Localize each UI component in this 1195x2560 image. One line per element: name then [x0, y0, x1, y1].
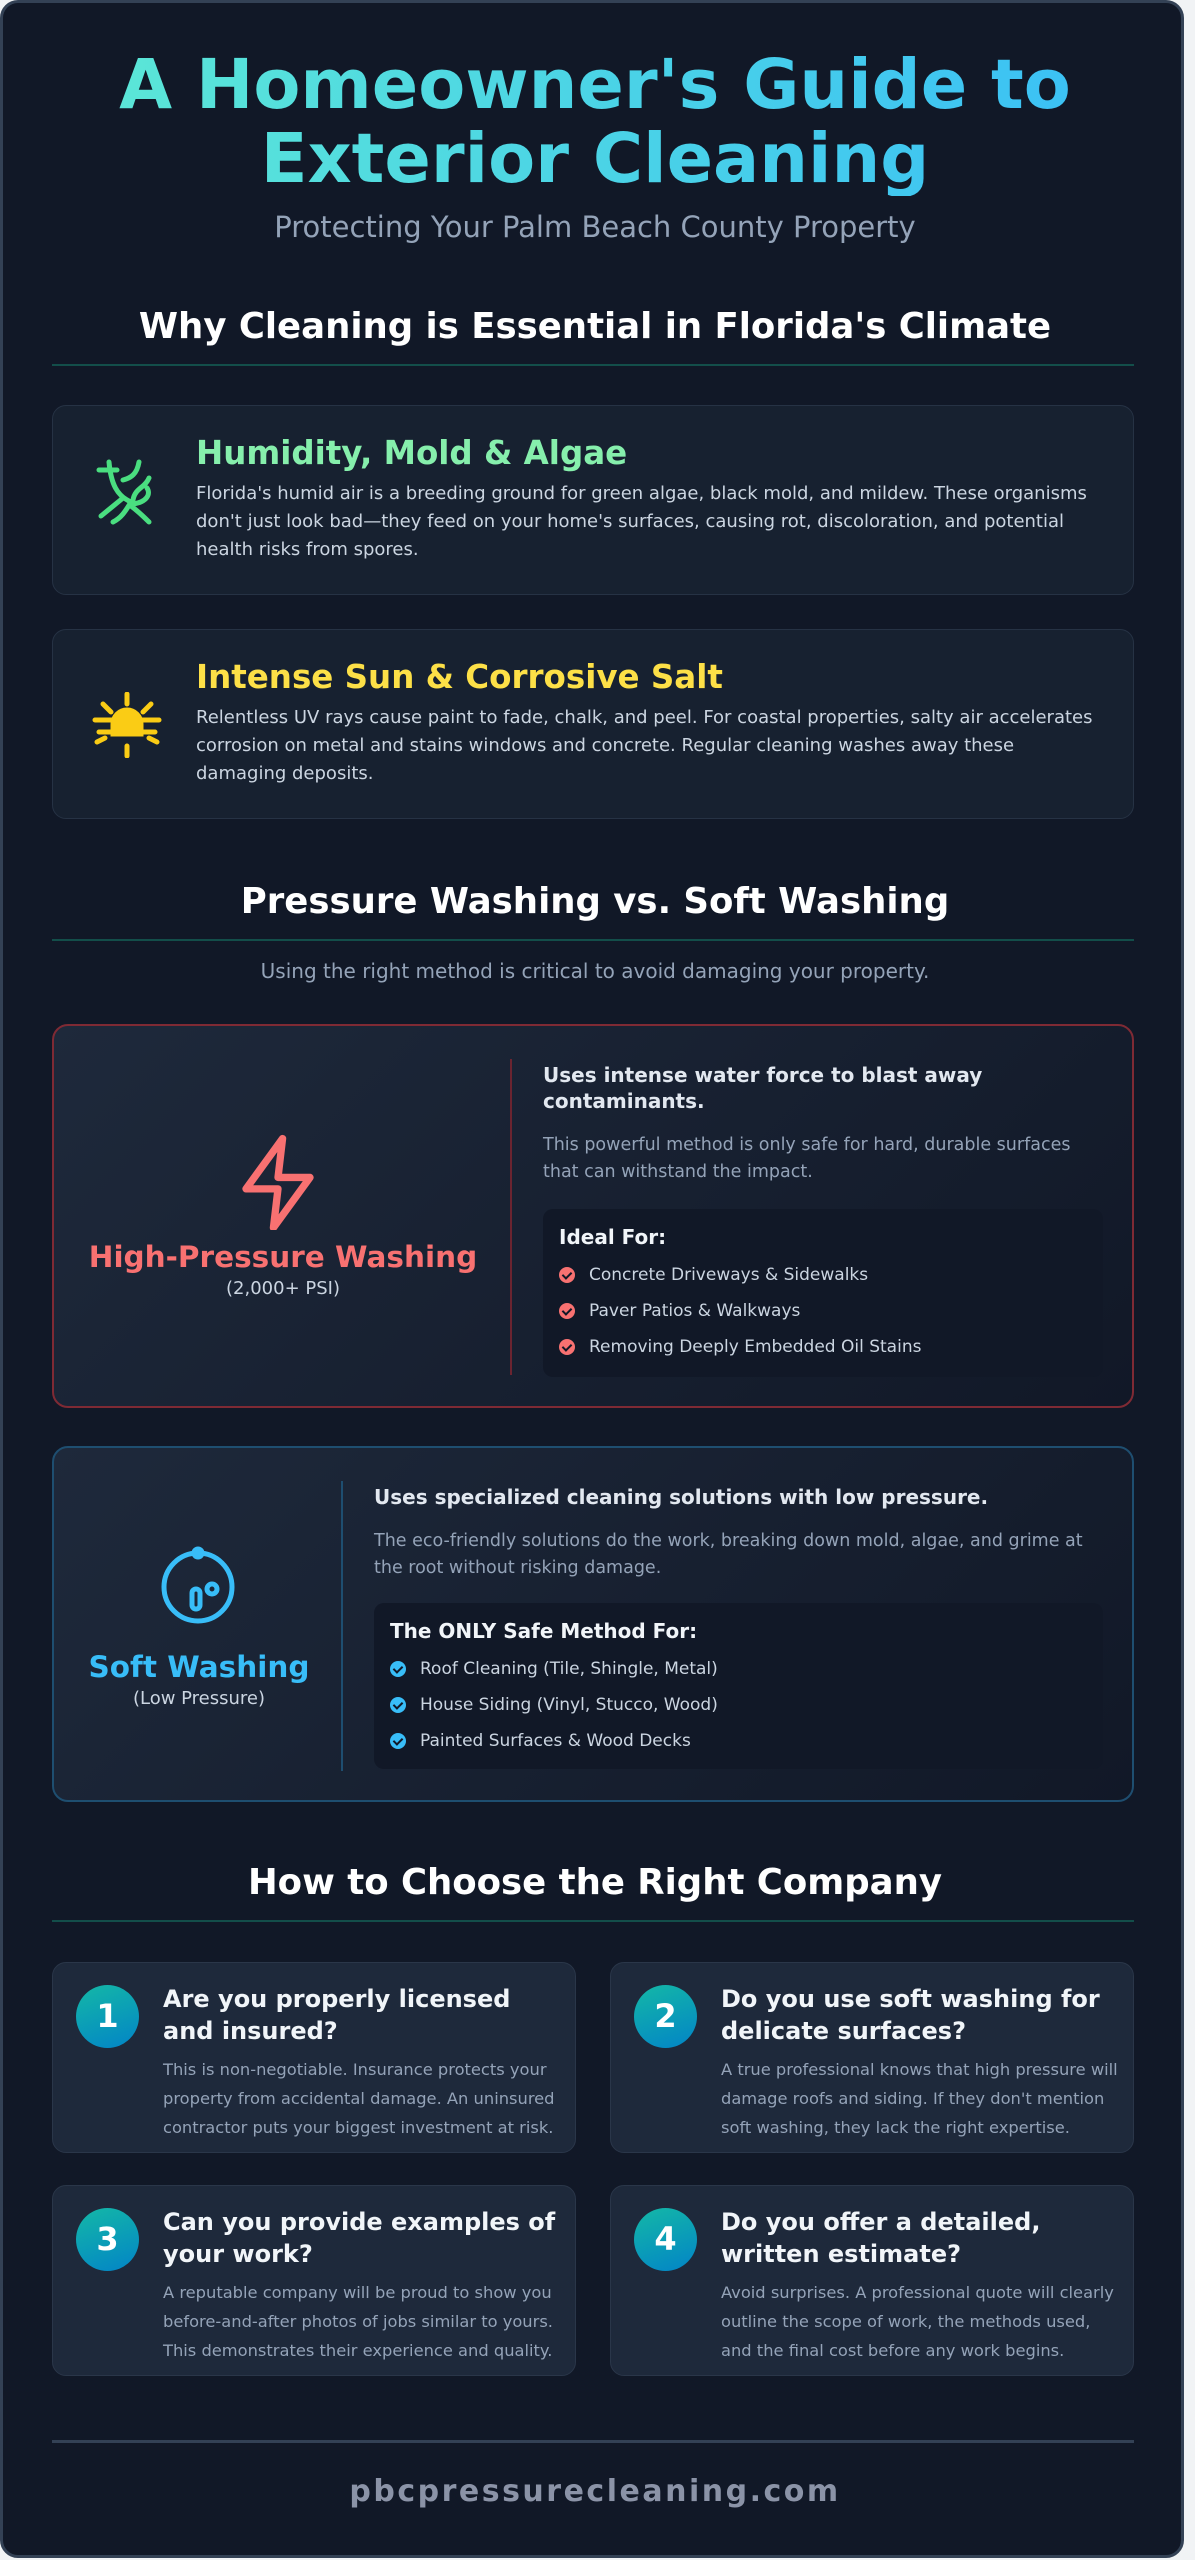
heading: Humidity, Mold & Algae	[196, 434, 627, 472]
description	[374, 1485, 1083, 1578]
list: safe method for: The ONLY Safe Method For:	[390, 1619, 697, 1643]
footer: website: pbcpressurecleaning.com	[349, 2474, 841, 2509]
question 2: 2	[654, 1997, 677, 2035]
description	[542, 1063, 1070, 1182]
description: Uses specialized cleaning solutions with low pressure.	[374, 1485, 988, 1509]
text: Florida's humid air is a breeding ground for green algae, black mold, and mildew. These organisms don't just look bad—they feed on your home's surfaces, causing rot, discoloration, and potential health risks from spores.	[196, 483, 1087, 560]
question 3: 3	[96, 2220, 119, 2258]
list: ideal for: Paver Patios & Walkways	[589, 1301, 800, 1321]
question 2: A true professional knows that high pressure will damage roofs and siding. If they don't mention soft washing, they lack the right expertise.	[721, 2060, 1118, 2137]
panel: humidity	[52, 405, 1134, 595]
title	[3, 48, 1187, 196]
label: High-Pressure Washing	[89, 1240, 477, 1274]
question 3: A reputable company will be proud to show you before-and-after photos of jobs similar to yours. This demonstrates their experience and quality.	[163, 2283, 553, 2360]
subtitle: Protecting Your Palm Beach County Property	[274, 210, 916, 244]
description: The eco-friendly solutions do the work, breaking down mold, algae, and grime at the root without risking damage.	[374, 1531, 1083, 1578]
label: (Low Pressure)	[133, 1688, 265, 1709]
question 1: 1	[96, 1997, 119, 2035]
label	[89, 1650, 309, 1709]
icon: soft wash	[162, 1546, 234, 1624]
heading: choose company: How to Choose the Right Company	[248, 1862, 942, 1903]
text: Relentless UV rays cause paint to fade, chalk, and peel. For coastal properties, salty air accelerates corrosion on metal and stains windows and concrete. Regular cleaning washes away these damaging deposits.	[196, 707, 1093, 784]
title: A Homeowner's Guide to	[119, 45, 1071, 125]
label: (2,000+ PSI)	[226, 1278, 340, 1299]
list: safe method for: House Siding (Vinyl, Stucco, Wood)	[420, 1695, 718, 1715]
question 2: Do you use soft washing for delicate surfaces?	[721, 1985, 1100, 2045]
heading: pressure vs soft: Pressure Washing vs. Soft Washing	[241, 881, 949, 922]
label	[89, 1240, 477, 1299]
icon: algae	[96, 460, 152, 524]
icon: lightning	[242, 1134, 314, 1230]
question 3	[52, 2185, 576, 2376]
question 1: This is non-negotiable. Insurance protects your property from accidental damage. An uninsured contractor puts your biggest investment at risk.	[163, 2060, 555, 2137]
question 4	[610, 2185, 1134, 2376]
heading: Intense Sun & Corrosive Salt	[196, 658, 723, 696]
panel: sun and salt	[52, 629, 1134, 819]
question 4: Avoid surprises. A professional quote will clearly outline the scope of work, the methods used, and the final cost before any work begins.	[721, 2283, 1114, 2360]
question 4: Do you offer a detailed, written estimate?	[721, 2208, 1040, 2268]
question 3: Can you provide examples of your work?	[163, 2208, 555, 2268]
panel: soft washing	[52, 1446, 1134, 1802]
list: ideal for: Concrete Driveways & Sidewalks	[589, 1265, 868, 1285]
heading: why cleaning: Why Cleaning is Essential in Florida's Climate	[139, 306, 1051, 347]
title: Exterior Cleaning	[261, 119, 929, 199]
list: safe method for: Roof Cleaning (Tile, Shingle, Metal)	[420, 1659, 718, 1679]
list: ideal for	[543, 1209, 1103, 1377]
question 1: Are you properly licensed and insured?	[163, 1985, 510, 2045]
icon: sun	[92, 692, 162, 758]
question 1	[52, 1962, 576, 2153]
question 4: 4	[654, 2220, 677, 2258]
question 2	[610, 1962, 1134, 2153]
description: This powerful method is only safe for hard, durable surfaces that can withstand the impact.	[543, 1135, 1070, 1182]
list: safe method for	[374, 1603, 1103, 1769]
subheading: Using the right method is critical to avoid damaging your property.	[261, 959, 929, 983]
panel: high-pressure	[52, 1024, 1134, 1408]
description: Uses intense water force to blast away contaminants.	[543, 1063, 982, 1113]
label: Soft Washing	[89, 1650, 309, 1684]
list: ideal for: Removing Deeply Embedded Oil Stains	[589, 1337, 921, 1357]
list: safe method for: Painted Surfaces & Wood Decks	[420, 1731, 691, 1751]
list: ideal for: Ideal For:	[559, 1225, 666, 1249]
